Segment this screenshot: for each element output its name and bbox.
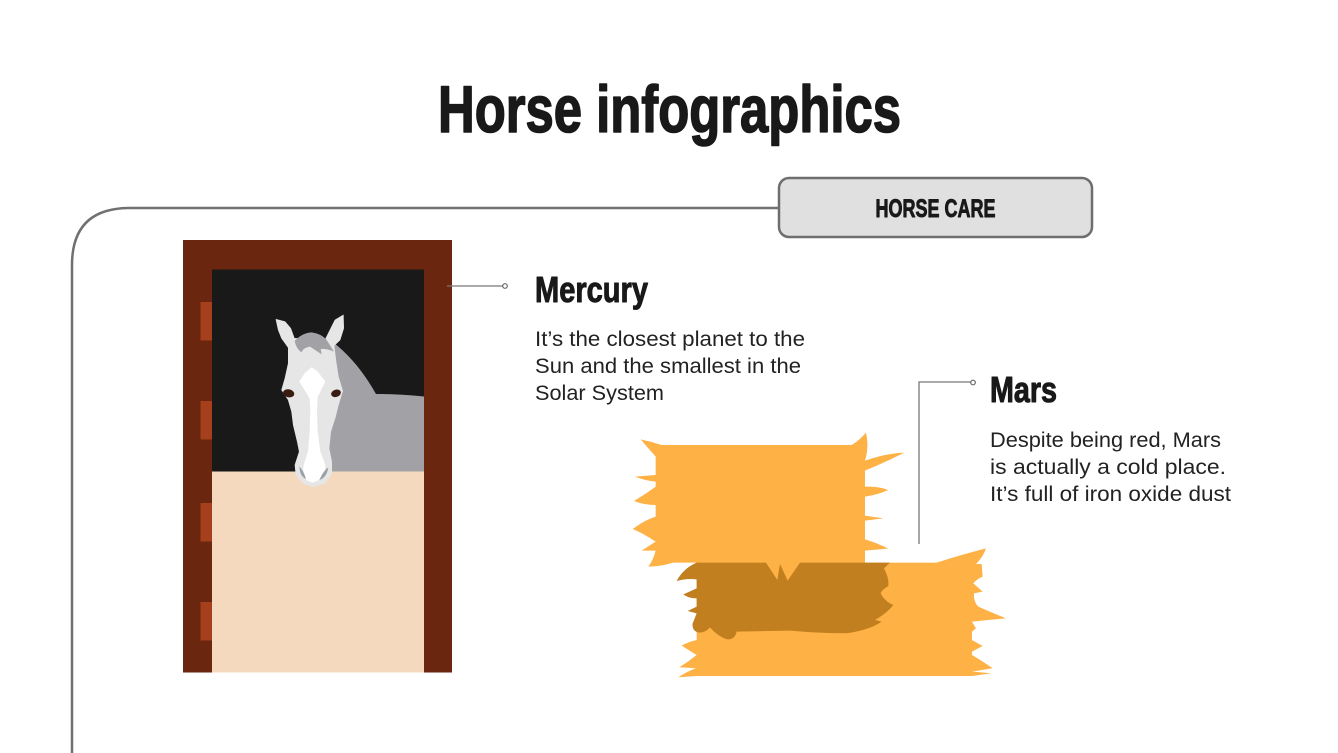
head and ears [276, 315, 344, 487]
blaze [300, 368, 325, 482]
horse head [276, 315, 344, 487]
connector: mercury [447, 284, 507, 288]
text block: mercury: Solar System [535, 381, 664, 405]
text block: mars [990, 369, 1231, 506]
door frame [183, 240, 452, 672]
panel heading: horse care: HORSE CARE [876, 195, 996, 223]
panel: rounded frame outline [72, 208, 780, 753]
connector: mars [919, 380, 975, 544]
text block: mercury [535, 269, 805, 405]
panel heading: horse care [779, 178, 1092, 237]
illustration: hay bales [633, 433, 1006, 677]
text block: mercury: Sun and the smallest in the [535, 354, 801, 378]
bottom hay bale [678, 548, 1006, 677]
door hinges [200, 302, 212, 640]
nostrils [299, 467, 306, 479]
forelock [295, 332, 334, 354]
text block: mars: is actually a cold place. [990, 455, 1226, 479]
eyes [282, 388, 295, 398]
text block: mars: It’s full of iron oxide dust [990, 482, 1231, 506]
illustration: stable door with horse [183, 240, 452, 672]
hay bale shadow [677, 563, 893, 639]
lower door panel [212, 472, 424, 672]
dark stable interior [212, 270, 424, 472]
text block: mercury: Mercury [535, 269, 648, 310]
top hay bale [633, 433, 904, 581]
text block: mars: Despite being red, Mars [990, 428, 1221, 452]
title: Horse infographics [438, 72, 901, 146]
horse body [326, 343, 424, 472]
text block: mars: Mars [990, 369, 1057, 410]
text block: mercury: It’s the closest planet to the [535, 327, 805, 351]
